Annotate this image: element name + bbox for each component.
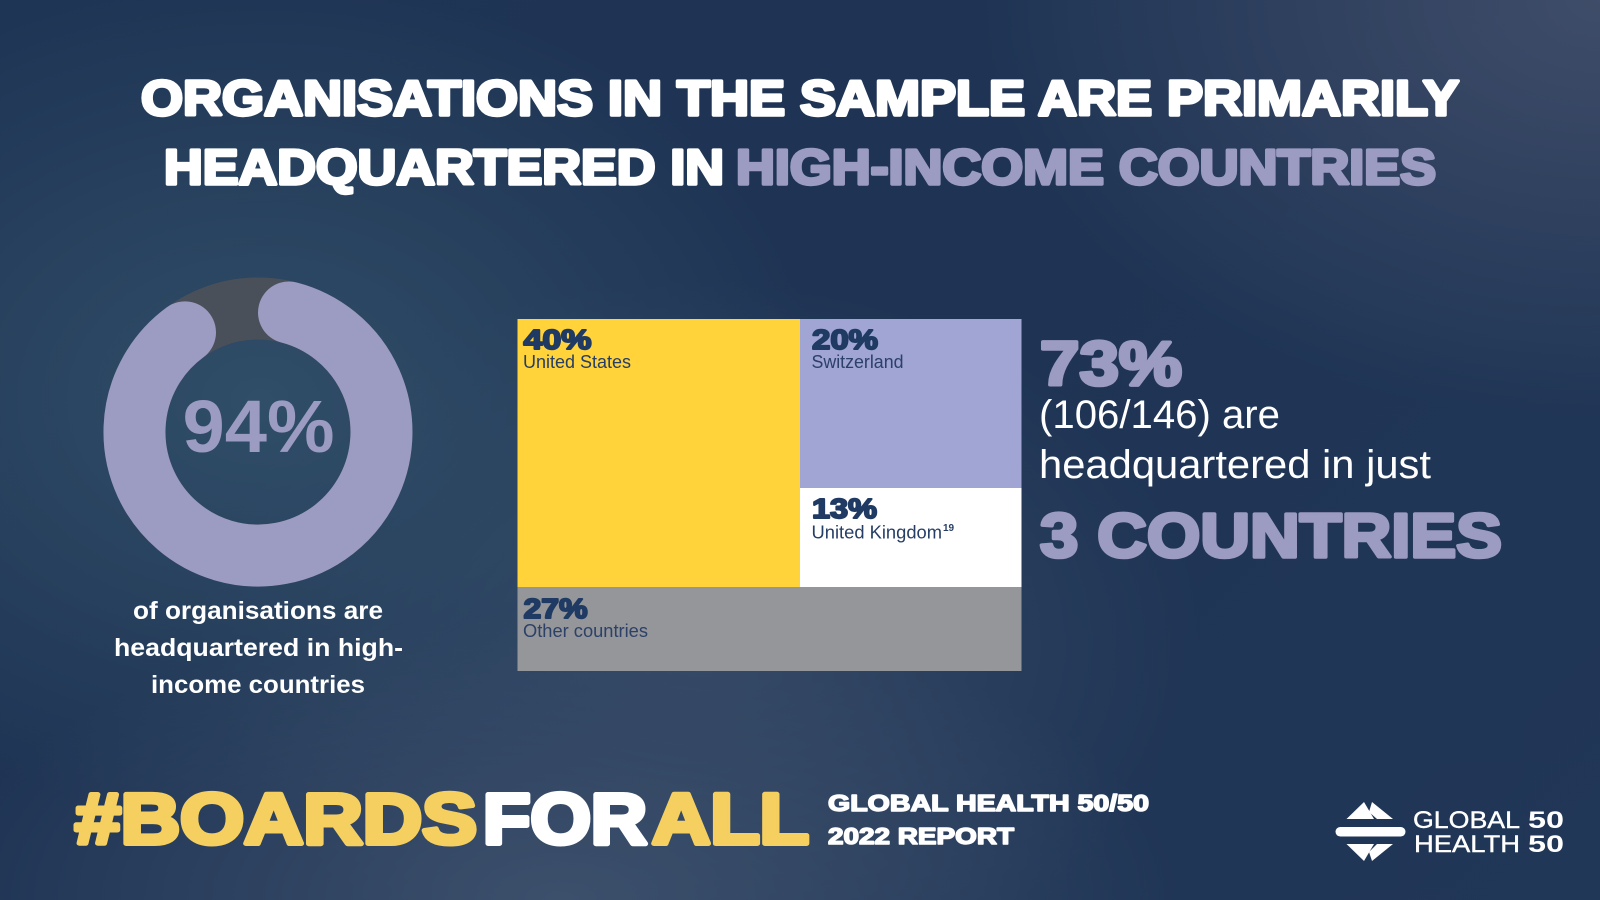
icon: logo mark [1336, 802, 1406, 861]
tile: United Kingdom [800, 488, 1022, 587]
tile: Switzerland: 20% [812, 324, 878, 355]
tile: United States: United States [523, 352, 631, 372]
logo: Global Health 50/50: HEALTH [1414, 831, 1520, 858]
hashtag: #BOARDSFORALL: #BOARDS [75, 780, 477, 860]
donut caption [114, 597, 403, 699]
hashtag: #BOARDSFORALL: ALL [652, 780, 809, 860]
logo: Global Health 50/50: 50 [1528, 831, 1564, 858]
donut caption: headquartered in high- [114, 634, 403, 662]
tile: United Kingdom: United Kingdom [812, 522, 942, 542]
logo: Global Health 50/50: GLOBAL [1413, 807, 1520, 834]
title: ORGANISATIONS IN THE SAMPLE ARE PRIMARILY [141, 71, 1459, 126]
title [141, 71, 1459, 195]
report label [828, 790, 1149, 849]
tile: United Kingdom: 13% [812, 493, 877, 524]
logo: Global Health 50/50 [1336, 802, 1564, 861]
title: HEADQUARTERED IN [164, 140, 724, 195]
treemap chart [518, 319, 1022, 671]
report label: 2022 REPORT [828, 823, 1014, 849]
callout: 73% in 3 countries: 73% [1040, 330, 1182, 399]
donut caption: of organisations are [133, 597, 383, 625]
tile: Switzerland: Switzerland [812, 352, 904, 372]
tile: Switzerland [800, 319, 1022, 488]
callout: 73% in 3 countries: headquartered in just [1039, 443, 1431, 487]
tile: Other countries: 27% [524, 593, 588, 624]
report label: GLOBAL HEALTH 50/50 [828, 790, 1149, 816]
tile: Other countries [518, 587, 1022, 671]
donut caption: income countries [151, 671, 365, 699]
callout: 73% in 3 countries: (106/146) are [1039, 393, 1280, 437]
title: HIGH-INCOME COUNTRIES [736, 140, 1436, 195]
tile: United Kingdom: 19 [943, 523, 955, 534]
donut chart: 94%: 94% [182, 385, 334, 468]
donut chart: 94% [134, 308, 382, 556]
hashtag: #BOARDSFORALL [75, 780, 809, 860]
tile: United States: 40% [524, 324, 592, 355]
logo: Global Health 50/50: 50 [1528, 807, 1564, 834]
callout: 73% in 3 countries [1039, 330, 1502, 571]
hashtag: #BOARDSFORALL: FOR [483, 780, 647, 860]
callout: 73% in 3 countries: 3 COUNTRIES [1040, 502, 1502, 571]
tile: United States [518, 319, 800, 587]
tile: Other countries: Other countries [523, 621, 648, 641]
